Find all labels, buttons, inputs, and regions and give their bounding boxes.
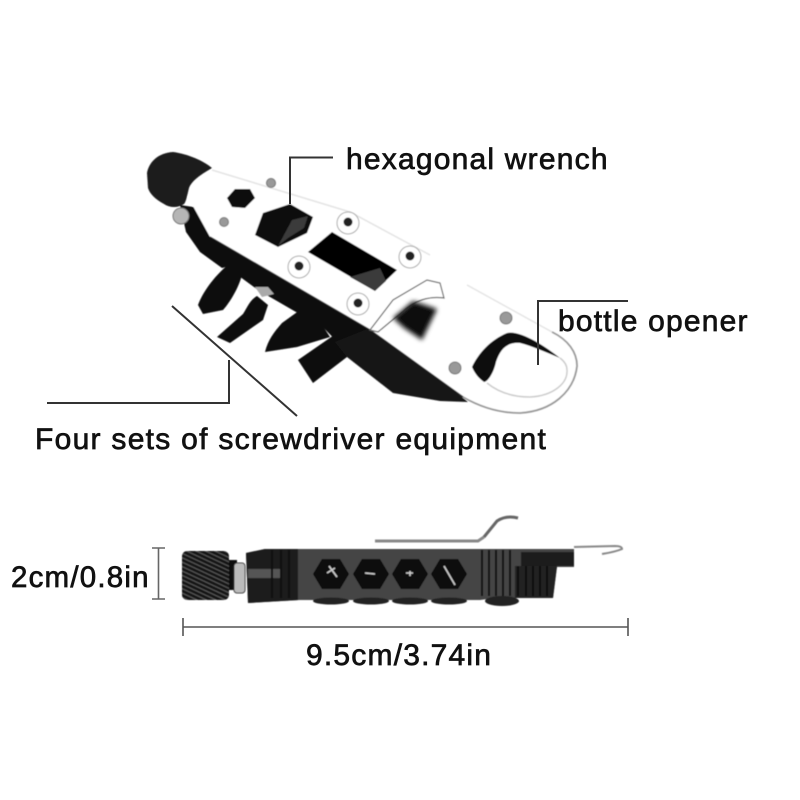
rectangular window xyxy=(308,232,397,291)
black hinge behind the plate xyxy=(180,205,245,268)
large hexagon hole: hexagonal wrench xyxy=(255,204,313,247)
hinge bracket shadow xyxy=(393,301,437,340)
hinge pin xyxy=(173,208,189,224)
screwdriver bit: wide blade xyxy=(298,333,347,383)
small hexagon hole xyxy=(227,189,255,208)
clip xyxy=(375,537,484,541)
screwdriver bit: top left xyxy=(198,263,243,314)
collar xyxy=(229,560,237,590)
illustration: multitool, angled view xyxy=(147,152,577,413)
hexagon slots with bits xyxy=(313,559,467,589)
grip ribs xyxy=(272,550,547,598)
hinge bracket xyxy=(370,280,444,332)
screws xyxy=(288,212,421,315)
rivets xyxy=(220,178,512,374)
screwdriver bit: flat blade xyxy=(217,296,268,343)
black body band under the plate xyxy=(208,235,372,350)
illustration: multitool, side view xyxy=(182,517,622,606)
dimension: height xyxy=(152,548,165,599)
side body xyxy=(246,549,574,603)
label: length: 9.5cm/3.74in xyxy=(306,639,492,672)
bit marks xyxy=(327,566,455,585)
knob xyxy=(147,152,212,207)
leader: screwdriver equipment xyxy=(47,306,297,416)
screwdriver bit: phillips xyxy=(265,310,330,352)
label: height: 2cm/0.8in xyxy=(11,561,150,594)
bottle opener hole xyxy=(472,333,560,382)
scalloped underside xyxy=(313,596,519,606)
label: screwdriver equipment: Four sets of screwdriver equipment xyxy=(35,423,547,456)
steel plate xyxy=(188,170,577,413)
label: hexagonal wrench: hexagonal wrench xyxy=(346,143,609,176)
dimension: length xyxy=(183,618,628,636)
side knob xyxy=(182,551,229,600)
leader: bottle opener xyxy=(538,301,628,365)
right hook xyxy=(574,546,622,554)
dark grip under the plate xyxy=(335,328,468,402)
label: bottle opener: bottle opener xyxy=(558,305,749,338)
leader: hexagonal wrench xyxy=(290,158,333,204)
